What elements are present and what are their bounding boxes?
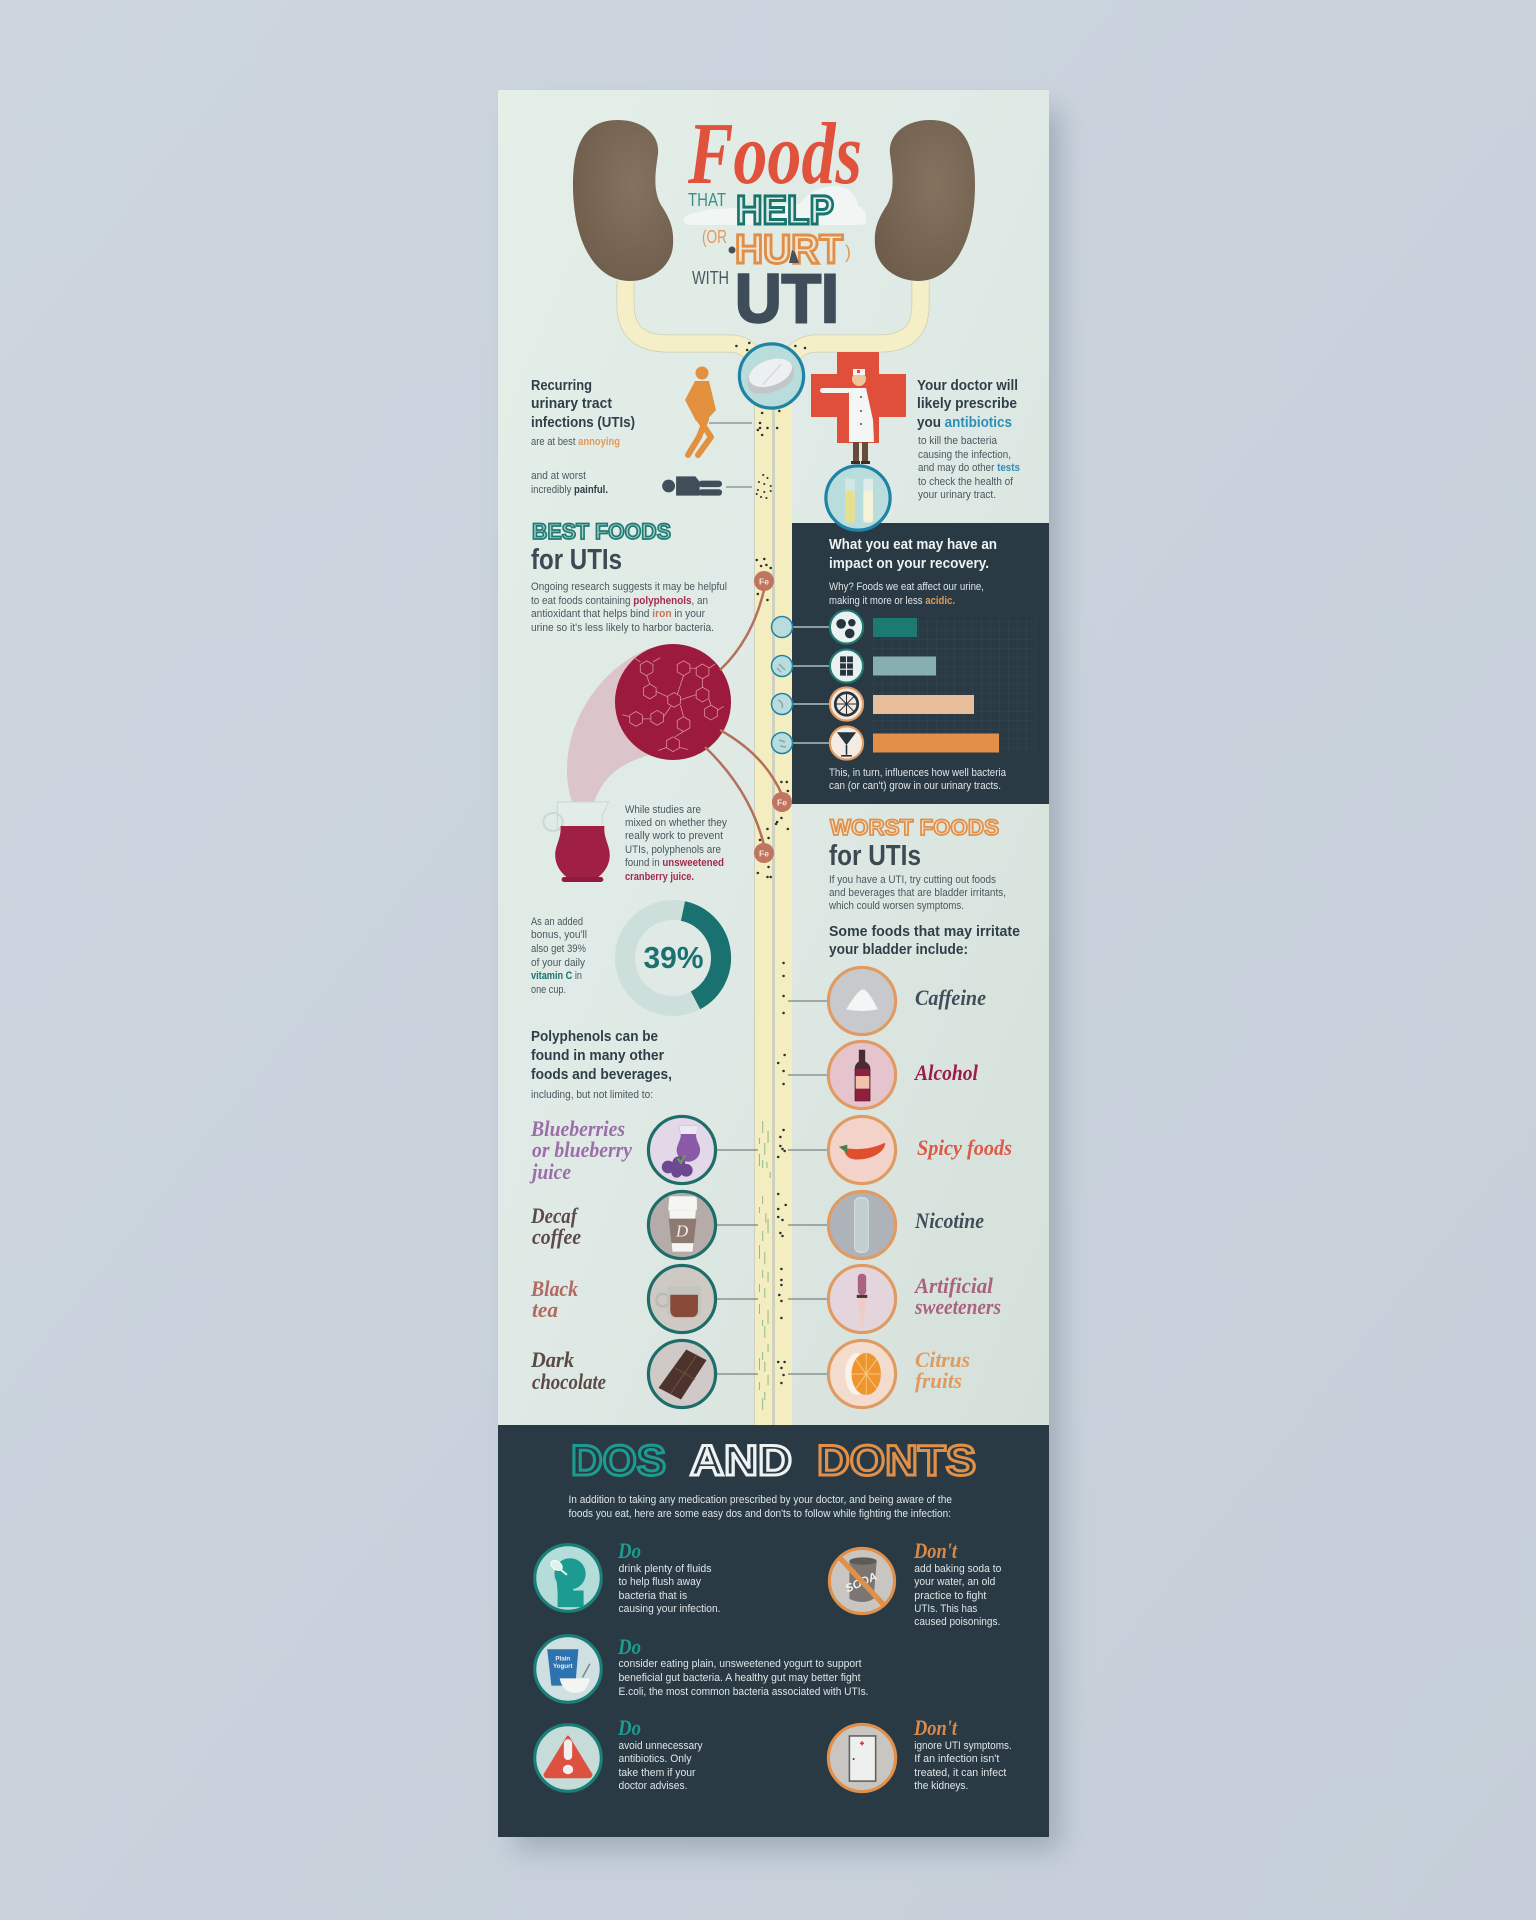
cranberry stream bbox=[567, 648, 650, 826]
text: do drink fluids: Do bbox=[617, 1538, 641, 1563]
icon: cranberry juice pitcher bbox=[543, 802, 610, 882]
text: worst foods intro bbox=[828, 874, 1020, 958]
text: dont add baking soda: practice to fight bbox=[914, 1590, 986, 1602]
text: vitamin C bonus bbox=[531, 916, 587, 996]
label: nicotine: Nicotine bbox=[914, 1208, 984, 1233]
icon: blueberries circle bbox=[830, 610, 863, 644]
text: polyphenols in other foods bbox=[531, 1029, 672, 1101]
text: dont ignore symptoms: If an infection isn't bbox=[914, 1753, 999, 1765]
icon: tea mug circle bbox=[648, 1265, 716, 1333]
heading: dos and donts: DONTS bbox=[817, 1437, 976, 1485]
text: do avoid antibiotics: Do bbox=[617, 1715, 641, 1740]
icon: coffee cup circle: D bbox=[675, 1222, 689, 1241]
icon: blueberry juice circle bbox=[648, 1116, 716, 1184]
donut chart: 39% vitamin C: 39% bbox=[644, 940, 704, 975]
label: spicy foods: Spicy foods bbox=[917, 1135, 1012, 1160]
text: worst foods intro: If you have a UTI, try cutting out foods bbox=[829, 874, 997, 886]
heading: impact on recovery bbox=[829, 537, 997, 607]
text: do avoid antibiotics: doctor advises. bbox=[618, 1780, 688, 1792]
label: blueberries bbox=[529, 1116, 632, 1184]
text: do drink fluids: drink plenty of fluids bbox=[618, 1563, 712, 1575]
icon: iron Fe 1 bbox=[754, 571, 774, 591]
text: polyphenols in other foods: Polyphenols can be bbox=[531, 1029, 658, 1045]
text: dont ignore symptoms bbox=[913, 1715, 1012, 1792]
icon: baking soda circle bbox=[829, 1548, 895, 1614]
text: cranberry juice note: While studies are bbox=[625, 804, 701, 816]
label: black tea: tea bbox=[532, 1297, 558, 1322]
text: cranberry juice note: found in unsweetened bbox=[625, 857, 724, 869]
bar chart: acidity bars bbox=[873, 618, 999, 752]
text: dont ignore symptoms: treated, it can infect bbox=[914, 1767, 1006, 1779]
text: doctor prescribes antibiotics: to kill the bacteria bbox=[918, 435, 997, 447]
title: UTI bbox=[735, 260, 839, 337]
text: dont add baking soda: your water, an old bbox=[914, 1576, 995, 1588]
label: black tea bbox=[530, 1276, 578, 1322]
icons: bacteria bubbles bbox=[772, 616, 792, 754]
text: do avoid antibiotics: take them if your bbox=[618, 1767, 696, 1779]
text: dont add baking soda: add baking soda to bbox=[914, 1563, 1001, 1575]
icon: drinking head circle bbox=[535, 1545, 601, 1611]
text: do avoid antibiotics bbox=[617, 1715, 703, 1792]
text: doctor prescribes antibiotics: Your doctor will bbox=[917, 378, 1018, 394]
heading: worst foods: WORST FOODS bbox=[830, 815, 999, 840]
label: citrus fruits bbox=[915, 1347, 970, 1393]
icon: caffeine circle bbox=[828, 967, 896, 1035]
text: doctor prescribes antibiotics: and may do other tests bbox=[918, 462, 1020, 474]
heading: worst foods: for UTIs bbox=[829, 840, 921, 872]
text: dont add baking soda: caused poisonings. bbox=[914, 1616, 1000, 1628]
icon: iron Fe 2 bbox=[772, 792, 792, 812]
text: polyphenols intro: urine so it's less likely to harbor bacteria. bbox=[531, 622, 714, 634]
text: dos and donts intro: foods you eat, here are some easy dos and don'ts to follow while fighting the infection: bbox=[568, 1508, 951, 1520]
text: worst foods intro: which could worsen symptoms. bbox=[828, 900, 964, 912]
text: polyphenols intro: to eat foods containing polyphenols, an bbox=[531, 595, 708, 607]
heading: impact on recovery: Why? Foods we eat affect our urine, bbox=[829, 581, 984, 593]
heading: impact on recovery: What you eat may have an bbox=[829, 537, 997, 553]
text: dont add baking soda: UTIs. This has bbox=[914, 1603, 978, 1615]
text: vitamin C bonus: one cup. bbox=[531, 984, 566, 996]
text: vitamin C bonus: vitamin C in bbox=[531, 970, 582, 982]
label: black tea: Black bbox=[530, 1276, 578, 1301]
heading: dos and donts: DOS bbox=[571, 1437, 666, 1485]
text: do drink fluids: causing your infection. bbox=[618, 1603, 720, 1615]
text: worst foods intro: your bladder include: bbox=[829, 942, 968, 958]
text: dont ignore symptoms: the kidneys. bbox=[914, 1780, 968, 1792]
text: do eat yogurt: Do bbox=[617, 1634, 641, 1659]
heading: impact on recovery: making it more or less acidic. bbox=[829, 595, 955, 607]
text: dont add baking soda: Don't bbox=[913, 1538, 958, 1563]
icon: pill in circle bbox=[739, 344, 804, 408]
label: blueberries: or blueberry bbox=[532, 1137, 632, 1162]
heading: worst foods bbox=[829, 815, 999, 872]
text: doctor prescribes antibiotics: causing the infection, bbox=[918, 449, 1011, 461]
text: polyphenols in other foods: found in many other bbox=[531, 1048, 664, 1064]
icon: yogurt circle bbox=[535, 1636, 601, 1702]
panel: urine acidity chart: can (or can't) grow in our urinary tracts. bbox=[829, 780, 1001, 792]
text: cranberry juice note: mixed on whether they bbox=[625, 817, 728, 829]
text: vitamin C bonus: bonus, you'll bbox=[531, 929, 587, 941]
text: recurring UTIs: infections (UTIs) bbox=[531, 415, 635, 431]
label: citrus fruits: Citrus bbox=[915, 1347, 970, 1372]
title: HURT bbox=[735, 226, 843, 272]
text: doctor prescribes antibiotics: likely prescribe bbox=[917, 396, 1017, 412]
panel: dos and donts bbox=[498, 1425, 1049, 1837]
label: dark chocolate: chocolate bbox=[532, 1369, 606, 1394]
label: dark chocolate bbox=[530, 1347, 606, 1394]
donut chart: 39% vitamin C bbox=[625, 910, 721, 1006]
text: do eat yogurt bbox=[617, 1634, 868, 1698]
connector lines to food circles bbox=[717, 1001, 828, 1374]
icon: yogurt circle: Plain bbox=[555, 1656, 570, 1663]
title bbox=[684, 106, 866, 337]
text: vitamin C bonus: As an added bbox=[531, 916, 583, 928]
label: decaf coffee: coffee bbox=[532, 1224, 581, 1249]
icon: citrus circle bbox=[830, 687, 863, 721]
connector line bbox=[709, 423, 752, 487]
poster paper background bbox=[498, 90, 1049, 1430]
label: decaf coffee: Decaf bbox=[530, 1203, 579, 1228]
text: polyphenols in other foods: foods and beverages, bbox=[531, 1067, 672, 1083]
heading: impact on recovery: impact on your recovery. bbox=[829, 556, 989, 572]
label: artificial sweeteners bbox=[913, 1273, 1001, 1319]
icon: nicotine tube circle bbox=[828, 1191, 896, 1259]
icon: coffee cup circle bbox=[648, 1191, 716, 1259]
icon: iron Fe 3: Fe bbox=[759, 848, 769, 858]
title: WITH bbox=[692, 268, 729, 288]
icon: iron Fe 3 bbox=[754, 843, 774, 863]
iron binding lines bbox=[705, 590, 782, 845]
text: dont ignore symptoms: ignore UTI symptoms. bbox=[914, 1740, 1012, 1752]
label: dark chocolate: Dark bbox=[530, 1347, 574, 1372]
text: recurring UTIs: Recurring bbox=[531, 378, 592, 394]
bacteria dots in channel bbox=[735, 342, 806, 1384]
icon: iron Fe 1: Fe bbox=[759, 576, 769, 586]
text: do eat yogurt: beneficial gut bacteria. A healthy gut may better fight bbox=[618, 1672, 860, 1684]
urinary tract channel bbox=[626, 281, 920, 1426]
heading: best foods: BEST FOODS bbox=[532, 519, 671, 544]
text: do drink fluids: to help flush away bbox=[618, 1576, 702, 1588]
text: doctor prescribes antibiotics: to check the health of bbox=[918, 476, 1014, 488]
icon: lying figure bbox=[662, 476, 722, 496]
text: do eat yogurt: E.coli, the most common bacteria associated with UTIs. bbox=[618, 1686, 868, 1698]
text: do drink fluids: bacteria that is bbox=[618, 1590, 688, 1602]
text: worst foods intro: and beverages that are bladder irritants, bbox=[829, 887, 1006, 899]
panel: urine acidity chart bbox=[792, 523, 1049, 804]
text: dont add baking soda bbox=[913, 1538, 1001, 1628]
label: citrus fruits: fruits bbox=[915, 1368, 962, 1393]
text: recurring UTIs: are at best annoying bbox=[531, 436, 620, 448]
text: doctor prescribes antibiotics bbox=[917, 378, 1020, 501]
icon: doctor and red cross bbox=[811, 352, 906, 464]
label: alcohol: Alcohol bbox=[913, 1060, 979, 1085]
icon: orange standing figure bbox=[685, 366, 716, 455]
heading: dos and donts bbox=[571, 1437, 976, 1485]
text: polyphenols in other foods: including, but not limited to: bbox=[531, 1089, 653, 1101]
label: artificial sweeteners: sweeteners bbox=[914, 1294, 1001, 1319]
text: cranberry juice note: UTIs, polyphenols are bbox=[625, 844, 721, 856]
text: do eat yogurt: consider eating plain, unsweetened yogurt to support bbox=[618, 1658, 862, 1670]
text: dos and donts intro bbox=[568, 1494, 952, 1520]
icon: iron Fe 2: Fe bbox=[777, 798, 787, 808]
title: THAT bbox=[688, 190, 726, 210]
icon: right kidney bbox=[875, 120, 975, 281]
text: vitamin C bonus: also get 39% bbox=[531, 943, 586, 955]
label: blueberries: Blueberries bbox=[530, 1116, 625, 1141]
label: decaf coffee bbox=[530, 1203, 581, 1249]
text: do drink fluids bbox=[617, 1538, 720, 1615]
label: blueberries: juice bbox=[529, 1159, 571, 1184]
text: cranberry juice note: cranberry juice. bbox=[625, 871, 694, 883]
heading: best foods bbox=[531, 519, 671, 576]
title: HELP bbox=[736, 187, 834, 233]
text: dos and donts intro: In addition to taking any medication prescribed by your doctor, and being aware of the bbox=[568, 1494, 952, 1506]
title: ) bbox=[845, 242, 851, 262]
text: do avoid antibiotics: avoid unnecessary bbox=[618, 1740, 703, 1752]
icon: chocolate circle bbox=[830, 649, 863, 683]
text: recurring UTIs bbox=[531, 378, 635, 496]
title: (OR bbox=[702, 227, 727, 247]
heading: dos and donts: AND bbox=[690, 1437, 792, 1485]
text: polyphenols intro bbox=[531, 581, 727, 634]
label: artificial sweeteners: Artificial bbox=[913, 1273, 994, 1298]
icon: dropper circle bbox=[828, 1265, 896, 1333]
icon: alcohol bottle circle bbox=[828, 1041, 896, 1109]
text: doctor prescribes antibiotics: your urinary tract. bbox=[918, 489, 996, 501]
title: Foods bbox=[687, 106, 862, 203]
text: worst foods intro: Some foods that may irritate bbox=[829, 924, 1020, 940]
text: do avoid antibiotics: antibiotics. Only bbox=[618, 1753, 692, 1765]
text: polyphenols intro: antioxidant that helps bind iron in your bbox=[531, 608, 705, 620]
text: cranberry juice note bbox=[625, 804, 728, 883]
panel: urine acidity chart: This, in turn, influences how well bacteria bbox=[829, 767, 1006, 779]
icon: baking soda circle: SODA bbox=[844, 1571, 879, 1595]
icon: chili pepper circle bbox=[828, 1116, 896, 1184]
icon: doctor door circle bbox=[828, 1724, 896, 1792]
icon: warning sign circle bbox=[535, 1725, 601, 1791]
text: cranberry juice note: really work to prevent bbox=[625, 830, 723, 842]
label: caffeine: Caffeine bbox=[915, 985, 986, 1010]
icon: citrus slice circle bbox=[828, 1340, 896, 1408]
icon: cocktail circle bbox=[830, 726, 863, 760]
text: recurring UTIs: and at worst bbox=[531, 470, 586, 482]
text: recurring UTIs: urinary tract bbox=[531, 396, 612, 412]
green particles in channel bbox=[759, 1121, 770, 1410]
icon: left kidney bbox=[573, 120, 673, 281]
icon: chocolate bar circle bbox=[648, 1340, 716, 1408]
icon: yogurt circle: Yogurt bbox=[553, 1663, 573, 1670]
text: dont ignore symptoms: Don't bbox=[913, 1715, 958, 1740]
text: polyphenols intro: Ongoing research suggests it may be helpful bbox=[531, 581, 727, 593]
heading: best foods: for UTIs bbox=[531, 544, 622, 576]
icon: polyphenol molecule circle bbox=[615, 644, 731, 760]
text: doctor prescribes antibiotics: you antibiotics bbox=[917, 415, 1012, 431]
text: vitamin C bonus: of your daily bbox=[531, 957, 586, 969]
icon: test tubes in circle bbox=[826, 466, 890, 530]
text: recurring UTIs: incredibly painful. bbox=[531, 484, 608, 496]
